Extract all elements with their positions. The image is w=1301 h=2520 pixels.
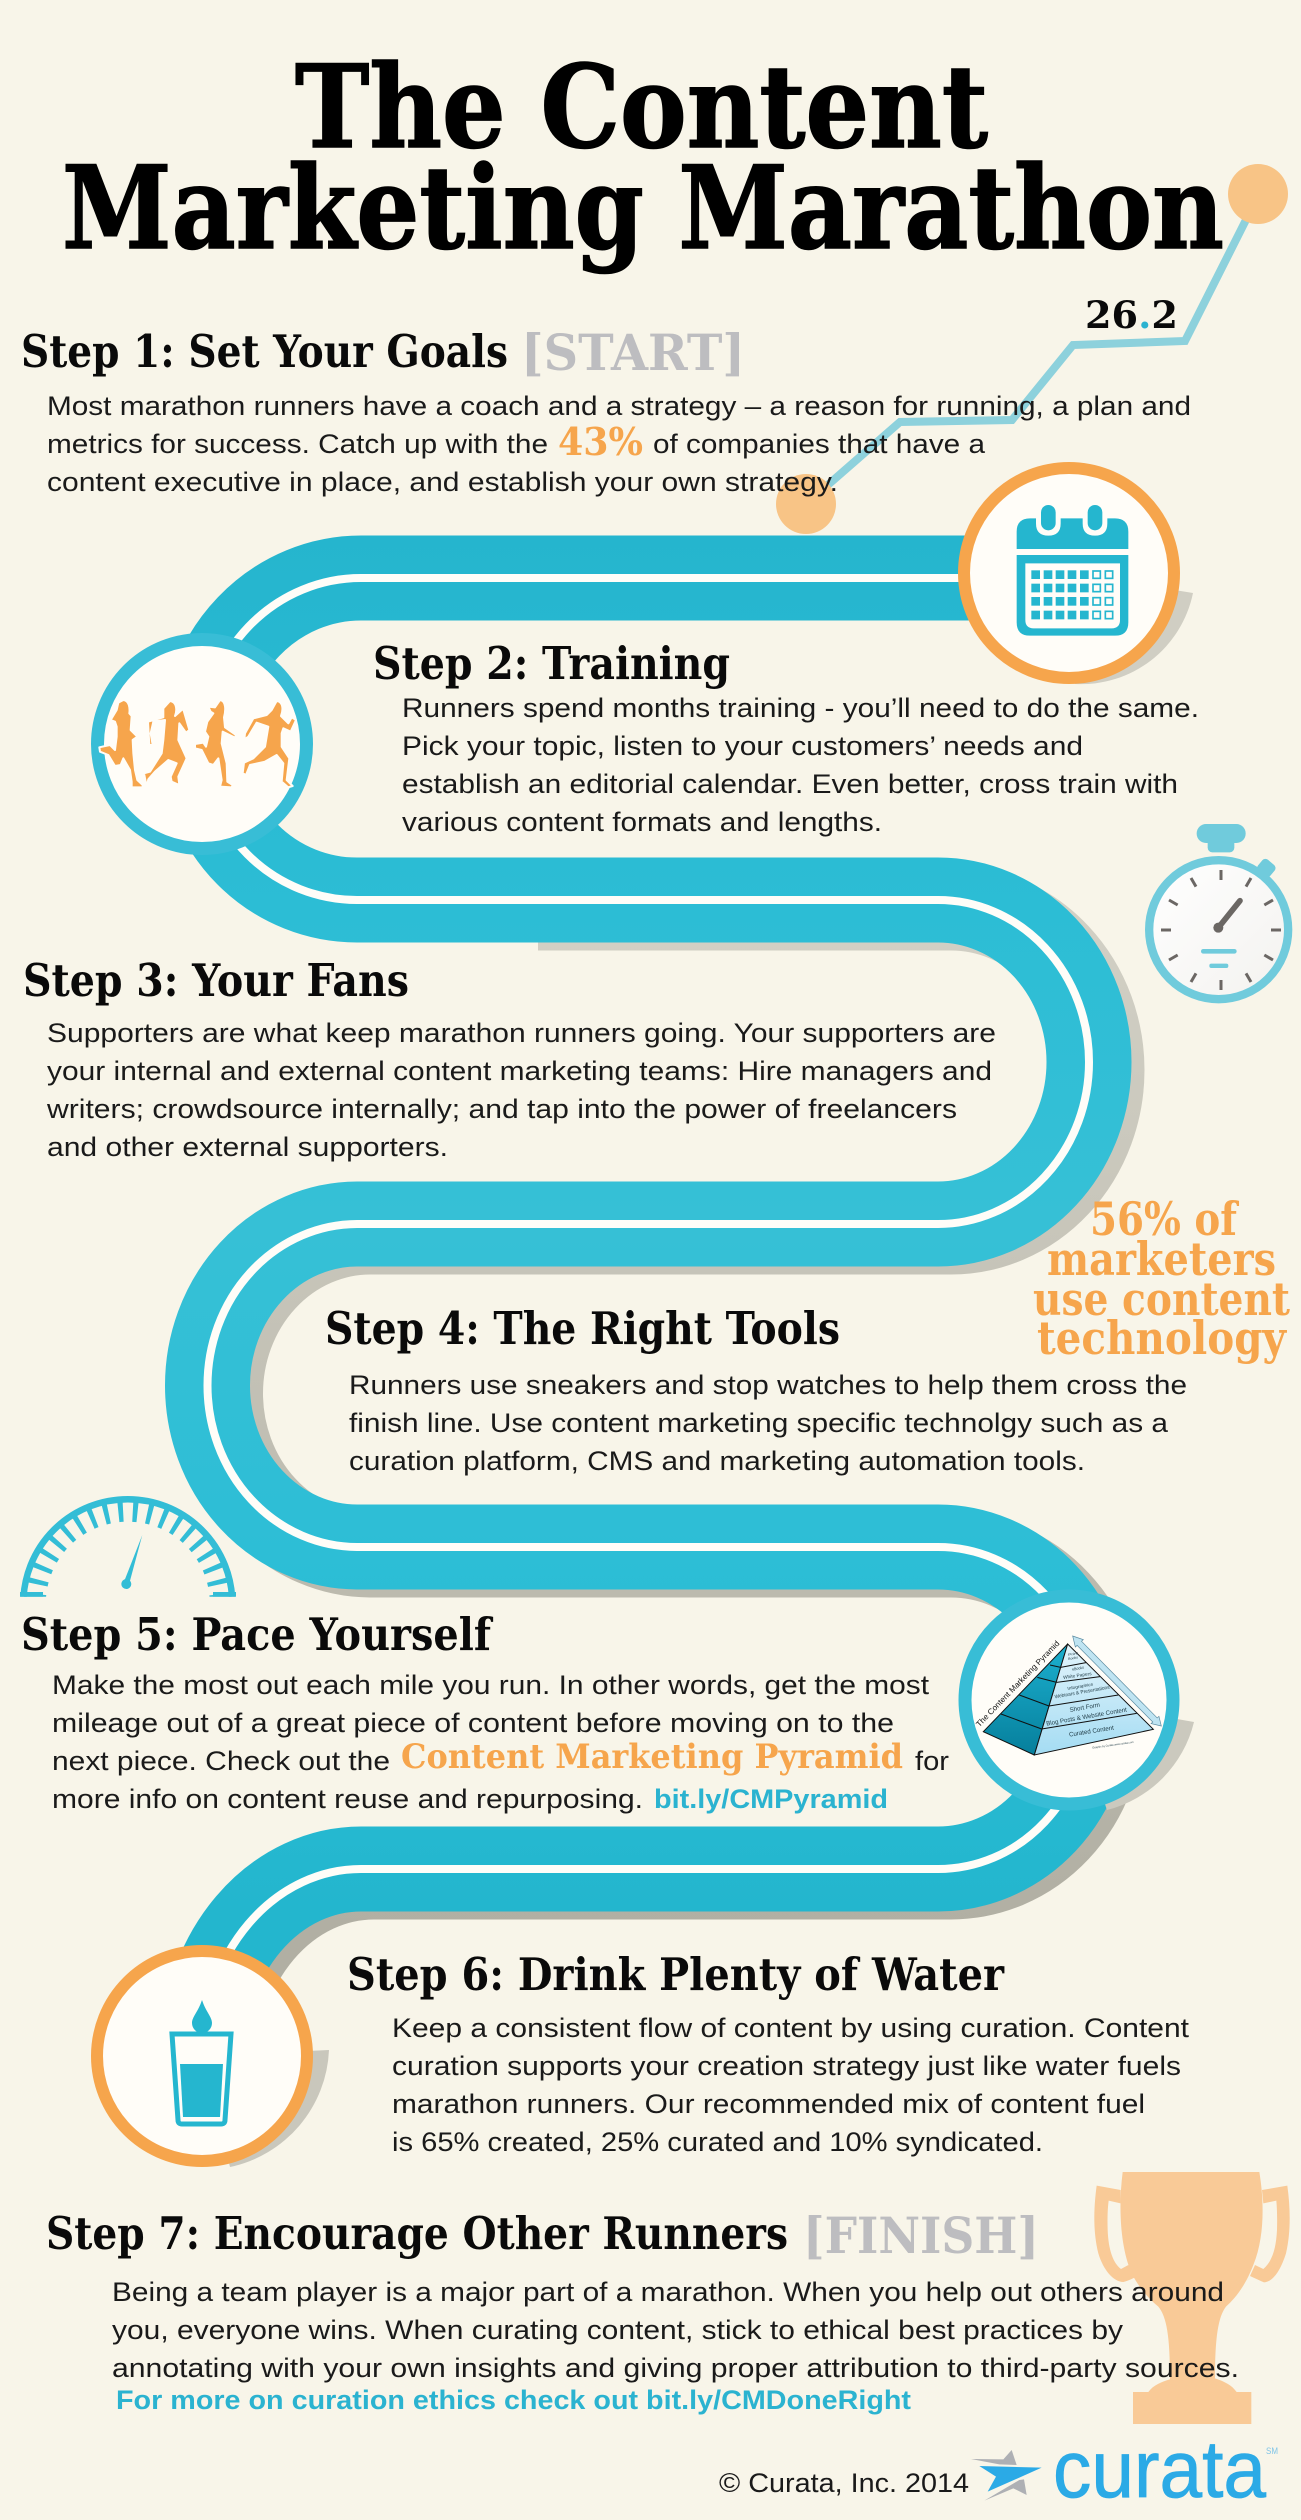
logo: curata: SM [1266,2446,1278,2456]
heading: step 7: Step 7: Encourage Other Runners [46,2207,788,2260]
body: step 4: finish line. Use content marketing specific technolgy such as a [349,1408,1169,1438]
body: step 1: Most marathon runners have a coach and a strategy – a reason for running, a plan and [47,391,1191,421]
heading: step 1: Step 1: Set Your Goals [21,325,508,378]
shadow: water circle [202,2050,329,2167]
body: step 3 [46,1018,996,1162]
icon: trophy [1094,2172,1290,2424]
body: step 5: more info on content reuse and repurposing. [52,1784,643,1814]
body: step 5: mileage out of a great piece of content before moving on to the [52,1708,894,1738]
heading: step 2: Step 2: Training [373,637,730,690]
body: step 5: Content Marketing Pyramid [401,1737,903,1777]
body: step 6: curation supports your creation strategy just like water fuels [392,2051,1181,2081]
icon: content marketing pyramid: Infographics [1067,1682,1093,1691]
body: step 2: Runners spend months training - you’ll need to do the same. [402,693,1199,723]
callout: 56% of marketers: 56% of [1090,1192,1240,1246]
icon: water glass [97,1951,307,2161]
icon: content marketing pyramid: Graphic by Curata www.curata.com [1092,1740,1135,1750]
road shadow [215,908,1102,2064]
link: curation ethics: For more on curation ethics check out bit.ly/CMDoneRight [116,2385,911,2415]
icon: content marketing pyramid: Curated Content [1069,1725,1115,1739]
icon: content marketing pyramid: White Papers [1063,1671,1093,1680]
body: step 5: Make the most out each mile you run. In other words, get the most [52,1670,930,1700]
body: step 6 [392,2013,1190,2157]
panel: step 7 [46,2206,1239,2415]
heading: step 3: Step 3: Your Fans [23,954,409,1007]
label: 26.2 miles: 26.2 [1085,293,1178,337]
panel: step 2 [373,637,1199,837]
icon: stopwatch [1149,824,1288,999]
heading: step 6: Step 6: Drink Plenty of Water [347,1948,1005,2001]
body: step 4: Runners use sneakers and stop watches to help them cross the [349,1370,1187,1400]
body: step 2: Pick your topic, listen to your customers’ needs and [402,731,1083,761]
body: step 3: and other external supporters. [47,1132,448,1162]
icon: content marketing pyramid: Books [1068,1655,1079,1661]
body: step 6: Keep a consistent flow of content by using curation. Content [392,2013,1190,2043]
body: step 6: marathon runners. Our recommended mix of content fuel [392,2089,1145,2119]
icon: content marketing pyramid: The Content Marketing Pyramid [974,1639,1061,1729]
body: step 1: of companies that have a [653,429,986,459]
icon: calendar [964,468,1174,678]
panel: step 5 [21,1608,949,1814]
body: step 3: your internal and external content marketing teams: Hire managers and [47,1056,992,1086]
body: step 7: annotating with your own insights and giving proper attribution to third-party sources. [112,2353,1239,2383]
body: step 1: content executive in place, and establish your own strategy. [47,467,838,497]
logo: curata: curata [1053,2425,1267,2515]
heading: step 4: Step 4: The Right Tools [325,1302,840,1355]
shadow: calendar circle [1069,573,1193,684]
panel: step 3 [23,954,996,1162]
serpentine road [202,578,1089,2056]
mileage line chart from start to 26.2 [776,164,1288,534]
body: step 4 [349,1370,1187,1476]
icon: content marketing pyramid: Blog Posts & Website Content [1046,1707,1128,1728]
body: step 2: various content formats and lengths. [402,807,882,837]
panel: step 4 [325,1302,1187,1476]
icon: content marketing pyramid: Print [1068,1651,1078,1657]
title [62,40,1224,275]
body: step 1: 43% [558,419,643,464]
body: step 2 [402,693,1199,837]
shadow: pyramid circle [1069,1700,1194,1810]
body: step 1: metrics for success. Catch up with the [47,429,548,459]
icon: content marketing pyramid: eBooks [1072,1665,1084,1672]
copyright: © Curata, Inc. 2014 [719,2468,969,2498]
panel: step 1 [21,323,1191,497]
icon: runners [98,640,306,848]
title: The Content [295,40,988,174]
body: step 7: you, everyone wins. When curating content, stick to ethical best practices by [112,2315,1124,2345]
icon: content marketing pyramid: Webinars & Presentations [1054,1685,1111,1700]
body: step 4: curation platform, CMS and marketing automation tools. [349,1446,1085,1476]
heading: step 5: Step 5: Pace Yourself [21,1608,493,1661]
finish tag: [FINISH] [803,2206,1039,2265]
body: step 5: next piece. Check out the [52,1746,390,1776]
callout: 56% of marketers [1033,1192,1291,1365]
body: step 1 [47,391,1191,497]
icon: content marketing pyramid [965,1596,1173,1804]
icon: content marketing pyramid: Short Form [1069,1702,1101,1714]
body: step 2: establish an editorial calendar. Even better, cross train with [402,769,1178,799]
body: step 6: is 65% created, 25% curated and 10% syndicated. [392,2127,1043,2157]
body: step 7: Being a team player is a major part of a marathon. When you help out others around [112,2277,1224,2307]
icon: speedometer [20,1496,236,1597]
body: step 7 [112,2277,1239,2383]
body: step 3: Supporters are what keep marathon runners going. Your supporters are [47,1018,996,1048]
body: step 5: for [915,1746,949,1776]
body: step 5: bit.ly/CMPyramid [654,1784,888,1814]
start tag: [START] [521,323,745,382]
panel: step 6 [347,1948,1190,2157]
body: step 3: writers; crowdsource internally; and tap into the power of freelancers [46,1094,957,1124]
body: step 5 [52,1670,949,1814]
